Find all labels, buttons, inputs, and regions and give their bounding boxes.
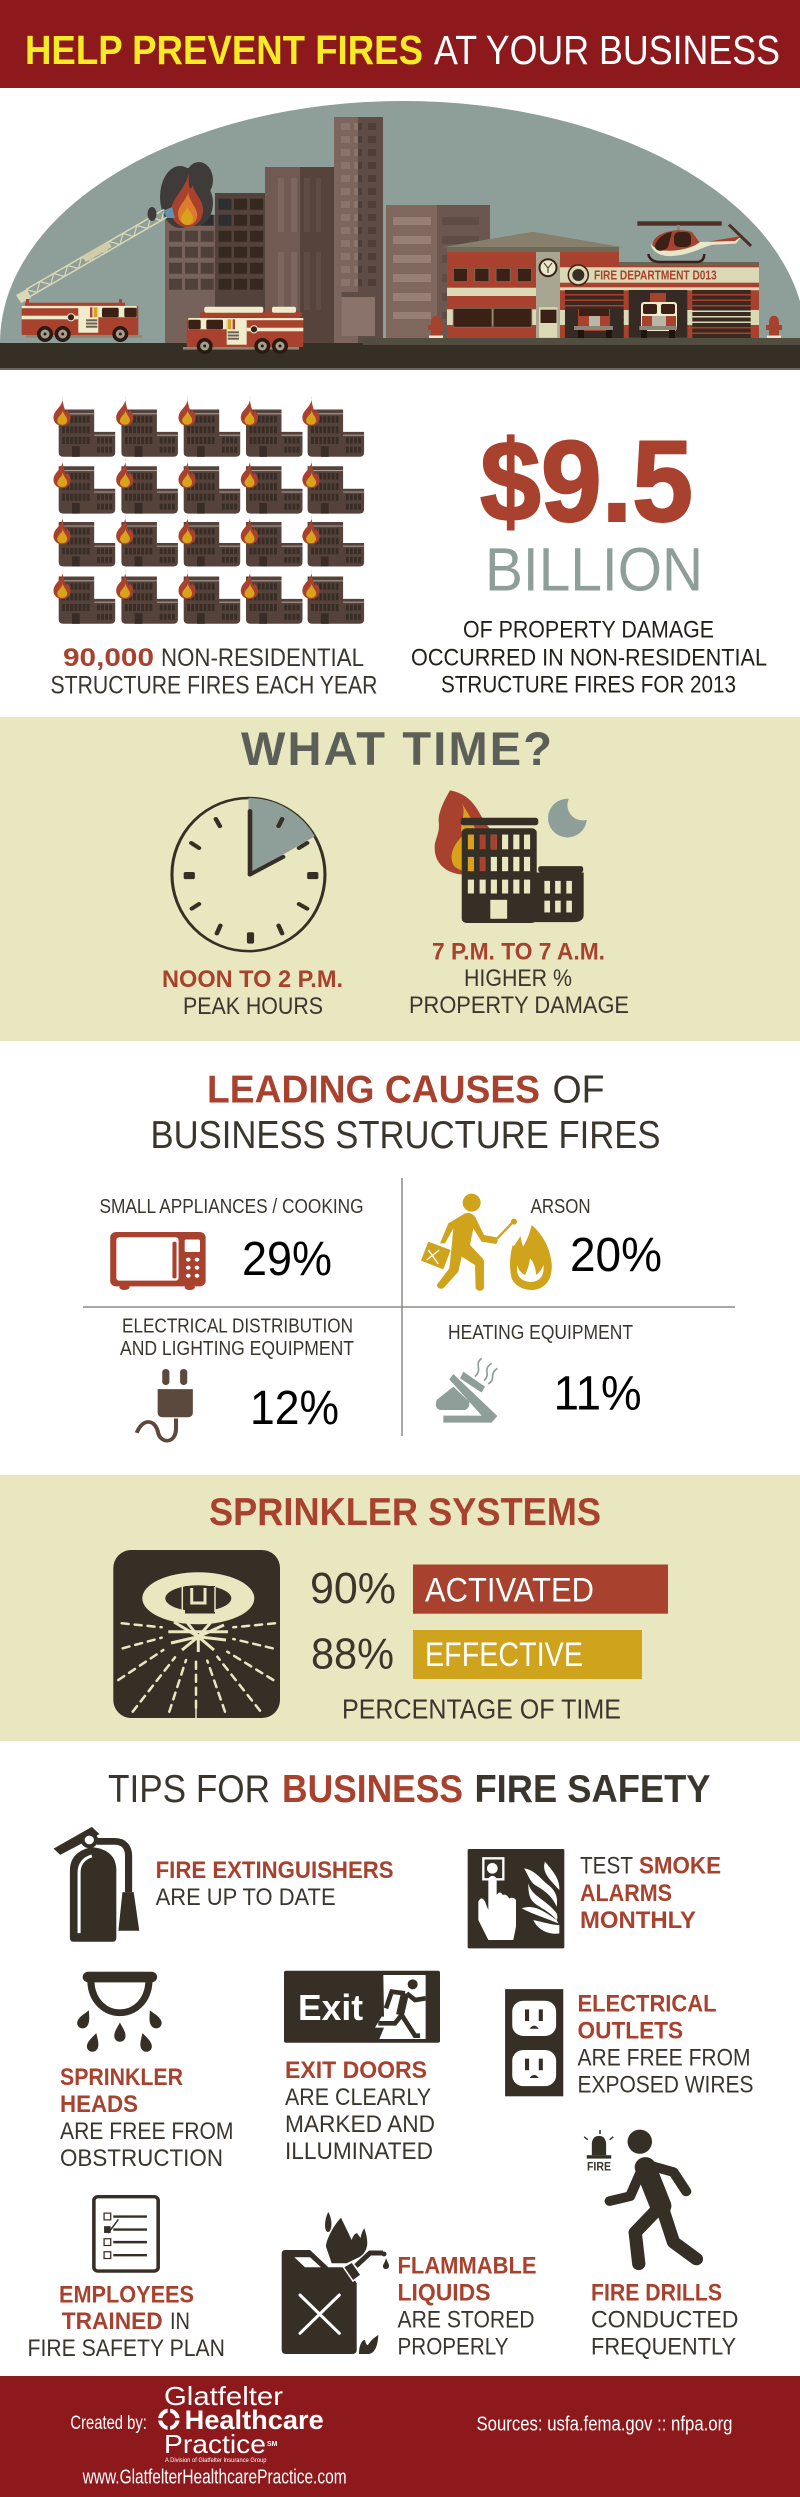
- tip: flammable liquids: [282, 2212, 536, 2361]
- stat: $9.5 billion: [411, 418, 767, 699]
- stat: activated: [310, 1564, 668, 1614]
- heading: BUSINESS: [282, 1768, 463, 1811]
- cause: appliances: SMALL APPLIANCES / COOKING: [100, 1196, 364, 1218]
- tip: smoke alarms: [468, 1849, 721, 1948]
- right building: [386, 205, 490, 343]
- tip: employees trained: IN: [170, 2308, 190, 2335]
- logo: [156, 2381, 324, 2464]
- icon: plug: [137, 1369, 193, 1441]
- tip: employees trained: [28, 2197, 225, 2362]
- night building on fire icon: [435, 790, 587, 923]
- caption: PERCENTAGE OF TIME: [342, 1694, 621, 1725]
- tip: exit doors: ARE CLEARLY: [285, 2084, 431, 2111]
- caption: noon to 2 pm: [162, 966, 343, 1020]
- tip: flammable liquids: LIQUIDS: [398, 2280, 490, 2307]
- sources: Sources: usfa.fema.gov :: nfpa.org: [476, 2414, 732, 2436]
- stat: activated: ACTIVATED: [425, 1572, 594, 1610]
- icon: heater: [436, 1358, 497, 1423]
- tip: electrical outlets: [505, 1989, 754, 2098]
- tip: electrical outlets: ELECTRICAL: [578, 1990, 716, 2017]
- stat: effective: 88%: [311, 1630, 394, 1679]
- tip: fire drills: [584, 2130, 738, 2361]
- fire truck right: [183, 307, 303, 354]
- stat: effective: EFFECTIVE: [425, 1636, 583, 1674]
- stat: $9.5 billion: OF PROPERTY DAMAGE: [463, 617, 714, 644]
- logo: Healthcare: [185, 2405, 324, 2435]
- created by: Created by:: [70, 2413, 147, 2434]
- tip: sprinkler heads: HEADS: [60, 2091, 138, 2118]
- text: 90,000 fires per year: 90,000: [63, 644, 154, 672]
- text: 90,000 fires per year: NON-RESIDENTIAL: [161, 644, 364, 672]
- truck in bay two: [639, 293, 677, 338]
- caption: 7 pm to 7 am: 7 P.M. TO 7 A.M.: [432, 939, 605, 966]
- tip: extinguisher: ARE UP TO DATE: [156, 1884, 336, 1911]
- hydrant right: [766, 316, 782, 338]
- helicopter: [637, 221, 751, 262]
- stat: activated: 90%: [310, 1564, 396, 1613]
- tip: fire drills: FIRE DRILLS: [591, 2280, 722, 2307]
- tip: smoke alarms: MONTHLY: [580, 1907, 696, 1934]
- fire truck left: [22, 299, 142, 342]
- text: 90,000 fires per year: STRUCTURE FIRES EACH YEAR: [50, 672, 378, 700]
- tip: flammable liquids: PROPERLY: [398, 2334, 508, 2361]
- tip: employees trained: EMPLOYEES: [59, 2282, 194, 2308]
- icon: checklist: [94, 2197, 158, 2271]
- icon: sprinkler head: [75, 1972, 164, 2053]
- cause: arson: 20%: [570, 1229, 662, 1282]
- text: 90,000 fires per year: [50, 644, 378, 700]
- icon: arsonist with flame: [421, 1194, 552, 1291]
- tip: sprinkler heads: SPRINKLER: [60, 2064, 183, 2091]
- logo: A Division of Glatfelter Insurance Group: [165, 2458, 267, 2464]
- tip: fire drills: CONDUCTED: [591, 2307, 738, 2334]
- heading: [150, 1068, 660, 1157]
- icon: outlet: [505, 1989, 563, 2096]
- tip: fire drills: FREQUENTLY: [591, 2334, 736, 2361]
- caption: noon to 2 pm: NOON TO 2 P.M.: [162, 966, 343, 993]
- tip: extinguisher: FIRE EXTINGUISHERS: [156, 1857, 394, 1884]
- heading: OF: [552, 1068, 604, 1112]
- stat: $9.5 billion: $9.5: [480, 418, 693, 546]
- heading: LEADING CAUSES: [207, 1068, 540, 1112]
- logo: Practice: [164, 2429, 266, 2459]
- mid building: [265, 167, 334, 343]
- logo: Glatfelter: [164, 2381, 283, 2411]
- icon: fuel can with flames: [282, 2212, 389, 2354]
- icon: exit sign: [284, 1971, 440, 2043]
- tower: [334, 117, 383, 343]
- tip: electrical outlets: ARE FREE FROM: [578, 2044, 750, 2071]
- tip: exit doors: ILLUMINATED: [285, 2138, 433, 2165]
- cause: electrical: AND LIGHTING EQUIPMENT: [120, 1338, 354, 1360]
- cause: arson: ARSON: [531, 1196, 591, 1218]
- smoke and flame: [160, 162, 213, 228]
- cause: appliances: 29%: [242, 1233, 332, 1286]
- tip: smoke alarms: SMOKE: [639, 1853, 721, 1880]
- footer: [0, 2376, 800, 2497]
- tip: sprinkler heads: ARE FREE FROM: [60, 2118, 234, 2145]
- heading: BUSINESS STRUCTURE FIRES: [150, 1114, 660, 1157]
- truck in bay one: [574, 309, 613, 338]
- hero illustration: fire scene: [0, 101, 800, 370]
- clock icon: [172, 798, 325, 951]
- fire station: [442, 232, 759, 338]
- header banner: [0, 0, 800, 88]
- heading: SPRINKLER SYSTEMS: [209, 1491, 601, 1534]
- tip: fire drills: FIRE: [587, 2160, 611, 2174]
- cause: appliances: [100, 1196, 364, 1290]
- tip: electrical outlets: OUTLETS: [578, 2017, 683, 2044]
- burning building: [165, 193, 266, 343]
- caption: noon to 2 pm: PEAK HOURS: [183, 993, 323, 1020]
- tip: exit doors: EXIT DOORS: [285, 2057, 427, 2084]
- icon: alarm button: [468, 1849, 564, 1948]
- cause: electrical: 12%: [250, 1382, 339, 1435]
- stat: $9.5 billion: OCCURRED IN NON-RESIDENTIAL: [411, 644, 767, 671]
- tip: flammable liquids: FLAMMABLE: [398, 2253, 536, 2280]
- building icon grid: 90,000 fires: [53, 396, 364, 624]
- icon: alarm light: [584, 2130, 613, 2159]
- heading: TIPS FOR: [108, 1768, 270, 1811]
- cause: electrical: [120, 1315, 354, 1441]
- icon: running person: [610, 2130, 696, 2264]
- caption: 7 pm to 7 am: [409, 939, 629, 1019]
- tip: smoke alarms: TEST: [580, 1853, 633, 1880]
- ladder: [16, 207, 175, 303]
- panel: leading causes: [83, 1068, 735, 1441]
- cause: arson: [421, 1194, 662, 1291]
- cause: heating: HEATING EQUIPMENT: [448, 1322, 633, 1344]
- cause: electrical: ELECTRICAL DISTRIBUTION: [122, 1315, 353, 1337]
- tip: exit doors: MARKED AND: [285, 2111, 435, 2138]
- stat: $9.5 billion: BILLION: [485, 535, 703, 603]
- heading: WHAT TIME?: [241, 722, 552, 775]
- icon: extinguisher: [54, 1827, 139, 1942]
- heading: FIRE SAFETY: [474, 1768, 710, 1811]
- stat: $9.5 billion: STRUCTURE FIRES FOR 2013: [441, 672, 736, 699]
- tip: employees trained: TRAINED: [62, 2308, 163, 2335]
- tip: flammable liquids: ARE STORED: [398, 2307, 534, 2334]
- tip: sprinkler heads: OBSTRUCTION: [60, 2145, 223, 2172]
- tip: smoke alarms: ALARMS: [580, 1880, 672, 1907]
- icon: sprinkler: [113, 1550, 280, 1718]
- hydrant left: [428, 316, 444, 338]
- logo: SM: [267, 2441, 278, 2448]
- cause: heating: [436, 1322, 642, 1423]
- icon: exit sign: Exit: [298, 1987, 363, 2028]
- stat: effective: [311, 1630, 642, 1679]
- sky dome: [0, 101, 800, 343]
- panel: safety tips: [28, 1768, 754, 2362]
- tip: electrical outlets: EXPOSED WIRES: [578, 2072, 754, 2098]
- tip: employees trained: FIRE SAFETY PLAN: [28, 2335, 225, 2362]
- tip: exit doors: [284, 1971, 440, 2165]
- panel: sprinkler systems: [0, 1475, 800, 1741]
- ground: [0, 338, 800, 370]
- heading: [108, 1768, 710, 1811]
- title: highlighted part: HELP PREVENT FIRES: [25, 27, 423, 73]
- caption: 7 pm to 7 am: PROPERTY DAMAGE: [409, 992, 629, 1019]
- website: www.GlatfelterHealthcarePractice.com: [82, 2467, 347, 2489]
- tip: extinguisher: [54, 1827, 394, 1942]
- cause: heating: 11%: [554, 1368, 642, 1421]
- sign text: FIRE DEPARTMENT D013: [594, 268, 717, 282]
- icon: microwave: [110, 1232, 206, 1290]
- caption: 7 pm to 7 am: HIGHER %: [464, 965, 572, 992]
- panel: what time: [0, 717, 800, 1041]
- tip: sprinkler heads: [60, 1972, 234, 2172]
